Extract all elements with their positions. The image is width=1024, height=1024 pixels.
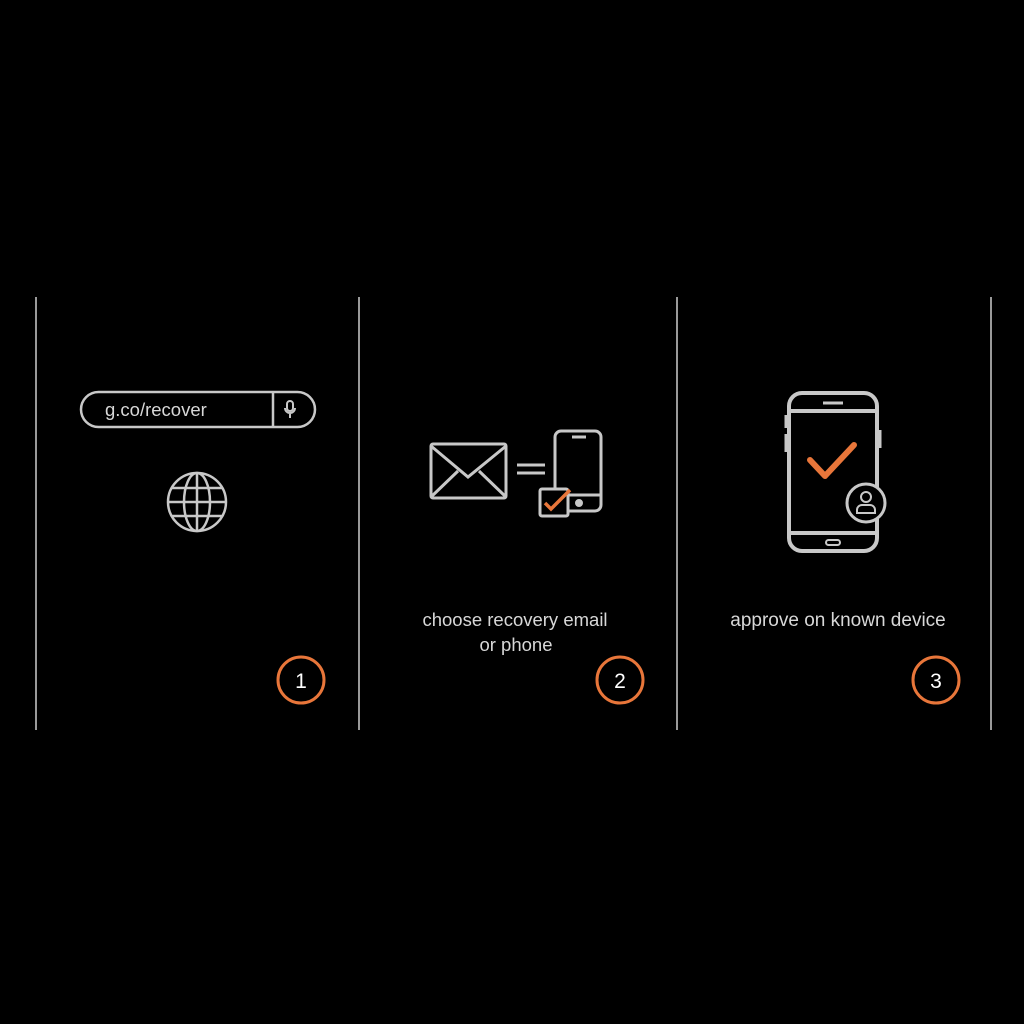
panel: step 2: [422, 431, 643, 703]
icon: globe: [168, 473, 226, 531]
icon: phone with check: [786, 393, 885, 551]
caption 2: or phone: [479, 634, 553, 655]
search bar: [81, 392, 315, 427]
search bar: g.co/recover: [105, 399, 207, 420]
caption 3: approve on known device: [730, 610, 946, 631]
step number 1: 1: [295, 670, 307, 693]
step number 3: 3: [930, 670, 942, 693]
icon: envelope equals phone: [431, 431, 601, 516]
caption 2: choose recovery email: [422, 609, 608, 630]
step number 2: [597, 657, 643, 703]
step number 1: [278, 657, 324, 703]
panel: step 1: [81, 392, 324, 703]
panel: step 3: [730, 393, 959, 703]
step number 3: [913, 657, 959, 703]
step number 2: 2: [614, 670, 626, 693]
